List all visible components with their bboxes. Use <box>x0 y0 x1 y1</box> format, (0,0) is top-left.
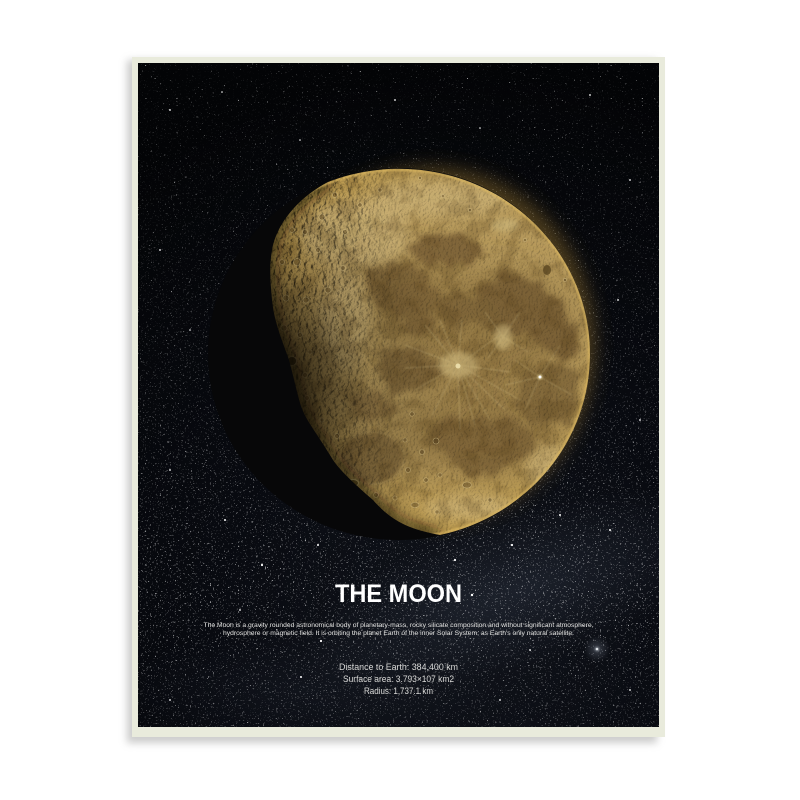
description text <box>204 622 594 637</box>
description text: hydrosphere or magnetic field. It is orbiting the planet Earth of the inner Solar System, as Earth's only natural satellite. <box>223 630 574 637</box>
panel: starry space background <box>138 63 659 727</box>
bright limb <box>310 168 590 535</box>
title: THE MOON <box>335 580 462 608</box>
distant glowing star <box>586 638 608 660</box>
Mare Humorum style basin <box>340 432 404 484</box>
warm glow around the lit limb <box>365 158 605 528</box>
key facts: Radius: 1,737.1 km <box>364 686 433 696</box>
moon illustration <box>208 160 600 545</box>
lunar highlands light patches <box>300 180 574 520</box>
lit side of the moon <box>270 168 590 535</box>
broad dark central region <box>370 255 575 475</box>
description text: The Moon is a gravity rounded astronomical body of planetary-mass, rocky silicate composition and without significant atmosphere, <box>204 622 594 629</box>
cratered highlands texture <box>270 169 404 515</box>
dark side of the moon <box>208 168 590 540</box>
key facts: Surface area: 3.793×107 km2 <box>343 674 454 684</box>
poster infographic <box>123 56 665 747</box>
bright crater spots <box>438 219 543 380</box>
lunar maria dark patches <box>345 233 582 474</box>
key facts <box>339 662 458 696</box>
surface mottling texture <box>272 168 590 533</box>
key facts: Distance to Earth: 384,400 km <box>339 662 458 672</box>
frame with drop shadow <box>127 57 665 743</box>
terminator shading <box>270 182 440 535</box>
impact crater rays <box>405 312 572 430</box>
craters <box>280 176 567 514</box>
